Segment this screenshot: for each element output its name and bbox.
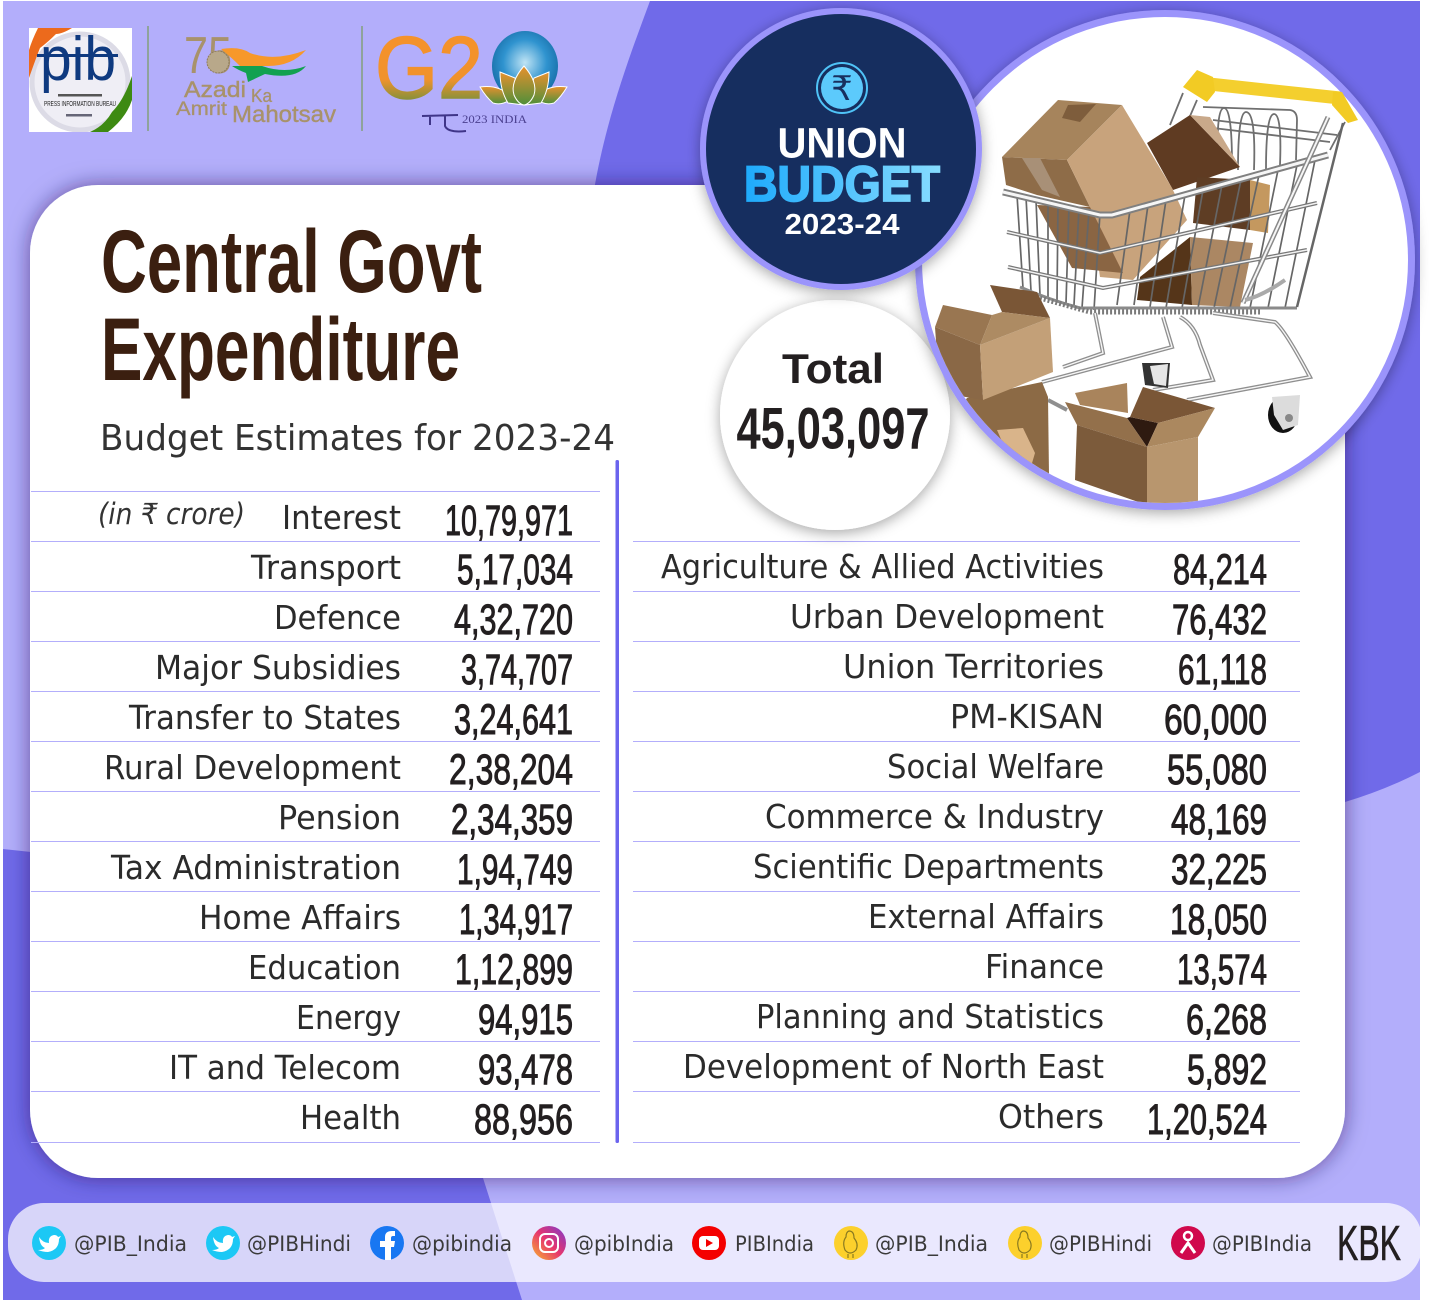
icon: rupee: ₹ — [831, 69, 853, 109]
row: Social Welfare: Social Welfare — [887, 747, 1104, 786]
row: Tax Administration: 1,94,749 — [457, 846, 573, 894]
icon: twitter — [32, 1226, 66, 1260]
row: IT and Telecom — [169, 1046, 573, 1094]
row: Social Welfare: 55,080 — [1167, 746, 1267, 794]
handle: @pibIndia: @pibIndia — [574, 1232, 674, 1256]
row: Union Territories: Union Territories — [843, 647, 1104, 686]
logo: PIB: PRESS INFORMATION BUREAU — [44, 101, 116, 108]
row: Energy — [296, 996, 573, 1044]
row: Urban Development: Urban Development — [790, 597, 1104, 636]
row: Interest — [282, 497, 573, 545]
row: Transfer to States: Transfer to States — [128, 698, 401, 737]
cart rear wires — [1170, 93, 1345, 170]
row: Health — [300, 1096, 573, 1144]
icon: koo — [834, 1226, 868, 1260]
footer: social media band — [8, 1203, 1422, 1282]
logo: Azadi Ka Amrit Mahotsav: Amrit — [176, 99, 228, 120]
row: Scientific Departments: Scientific Departments — [753, 847, 1104, 886]
cart frame and wheels — [1042, 313, 1310, 433]
row: Pension — [278, 796, 573, 844]
logo: Azadi Ka Amrit Mahotsav: Azadi — [184, 77, 246, 102]
lower boxes — [935, 285, 1215, 505]
row: Development of North East — [683, 1046, 1267, 1094]
callout: total — [720, 300, 950, 530]
logo: Azadi Ka Amrit Mahotsav: Mahotsav — [232, 101, 337, 127]
logo: G20: G2 — [375, 18, 483, 117]
row: External Affairs: External Affairs — [868, 897, 1104, 936]
row: Agriculture: 84,214 — [1173, 546, 1267, 594]
row: IT and Telecom: 93,478 — [478, 1046, 573, 1094]
row: Commerce and Industry — [765, 796, 1267, 844]
icon: youtube — [692, 1226, 726, 1260]
row: Rural Development: Rural Development — [104, 748, 401, 787]
row: Health: 88,956 — [474, 1096, 573, 1144]
row: Planning and Statistics: Planning and Statistics — [756, 997, 1104, 1036]
row: Major Subsidies — [155, 646, 573, 694]
row: Agriculture: Agriculture & Allied Activities — [661, 547, 1104, 586]
table: left column — [31, 492, 600, 1144]
cart handle — [1183, 70, 1358, 123]
handle: @PIBHindi: @PIBHindi — [247, 1232, 351, 1256]
handle: @PIBIndia: @PIBIndia — [1212, 1232, 1312, 1256]
row: Finance: Finance — [985, 947, 1104, 986]
row: PM-KISAN — [950, 696, 1267, 744]
row: Energy: 94,915 — [478, 996, 573, 1044]
row: Planning and Statistics: 6,268 — [1186, 996, 1267, 1044]
row: Transfer to States: 3,24,641 — [454, 696, 573, 744]
row: PM-KISAN: 60,000 — [1164, 696, 1267, 744]
title: Central Govt — [101, 211, 482, 311]
row: Development of North East: Development of North East — [683, 1047, 1104, 1086]
icon: koo hindi — [1008, 1226, 1042, 1260]
row: Urban Development — [790, 596, 1267, 644]
row: Others: Others — [998, 1097, 1104, 1136]
icon: facebook — [370, 1226, 404, 1260]
row: Development of North East: 5,892 — [1187, 1046, 1267, 1094]
row: Rural Development — [104, 746, 573, 794]
row: Finance: 13,574 — [1177, 946, 1267, 994]
logo: Azadi Ka Amrit Mahotsav: 75 — [184, 27, 232, 85]
row: Interest: Interest — [282, 498, 401, 537]
badge: Union Budget 2023-24: 2023-24 — [784, 209, 900, 241]
row: Major Subsidies: 3,74,707 — [461, 646, 573, 694]
row: Commerce and Industry: Commerce & Industry — [765, 797, 1104, 836]
row: Pension: Pension — [278, 798, 401, 837]
logo: PIB — [29, 25, 132, 132]
row: Pension: 2,34,359 — [451, 796, 573, 844]
panel: logos header — [29, 18, 567, 132]
row: Home Affairs — [199, 896, 573, 944]
row: Union Territories — [843, 646, 1267, 694]
row: Rural Development: 2,38,204 — [449, 746, 573, 794]
row: External Affairs: 18,050 — [1170, 896, 1267, 944]
row: Major Subsidies: Major Subsidies — [155, 648, 401, 687]
row: Home Affairs: Home Affairs — [199, 898, 401, 937]
rear boxes — [1137, 115, 1270, 307]
logo: G20 — [375, 18, 567, 131]
panel: main white card — [30, 185, 1345, 1178]
row: Interest: 10,79,971 — [445, 497, 573, 545]
illustration: shopping cart with boxes — [918, 14, 1412, 506]
row: Home Affairs: 1,34,917 — [459, 896, 573, 944]
badge: Union Budget 2023-24: BUDGET — [744, 156, 940, 212]
row: Union Territories: 61,118 — [1178, 646, 1267, 694]
row: Health: Health — [300, 1098, 401, 1137]
cart front wires — [1003, 117, 1343, 312]
logo: Azadi Ka Amrit Mahotsav: Ka — [251, 86, 273, 106]
row: Commerce and Industry: 48,169 — [1171, 796, 1267, 844]
row: Defence — [274, 596, 573, 644]
callout: total: Total — [782, 345, 884, 392]
row: Defence: 4,32,720 — [454, 596, 573, 644]
row: Defence: Defence — [274, 598, 401, 637]
big tilted box — [1002, 100, 1187, 280]
handle: PIBIndia: PIBIndia — [735, 1232, 814, 1256]
badge: Union Budget 2023-24 — [703, 11, 979, 287]
row: Education: Education — [248, 948, 401, 987]
callout: total: 45,03,097 — [736, 396, 930, 462]
row: Planning and Statistics — [756, 996, 1267, 1044]
handle: @PIB_India: @PIB_India — [74, 1232, 187, 1257]
row: Transfer to States — [128, 696, 573, 744]
row: Others: 1,20,524 — [1147, 1096, 1267, 1144]
handle: @PIBHindi koo: @PIBHindi — [1049, 1232, 1152, 1256]
row: Tax Administration — [110, 846, 573, 894]
icon: twitter hindi — [206, 1226, 240, 1260]
row: Education: 1,12,899 — [455, 946, 573, 994]
row: Energy: Energy — [296, 998, 401, 1037]
title — [101, 211, 482, 399]
badge: Union Budget 2023-24: UNION — [778, 120, 906, 168]
row: Scientific Departments — [753, 846, 1267, 894]
row: PM-KISAN: PM-KISAN — [950, 697, 1104, 736]
row: Finance — [985, 946, 1267, 994]
table: right column — [633, 542, 1300, 1144]
row: Scientific Departments: 32,225 — [1171, 846, 1267, 894]
row: Social Welfare — [887, 746, 1267, 794]
row: Others — [998, 1096, 1267, 1144]
row: Transport: 5,17,034 — [457, 546, 573, 594]
row: Transport — [250, 546, 573, 594]
column divider — [616, 460, 619, 1143]
row: Urban Development: 76,432 — [1172, 596, 1267, 644]
row: Tax Administration: Tax Administration — [110, 848, 401, 887]
row: IT and Telecom: IT and Telecom — [169, 1048, 401, 1087]
handle: @pibindia: @pibindia — [412, 1232, 512, 1256]
row: Education — [248, 946, 573, 994]
row: External Affairs — [868, 896, 1267, 944]
logo: G20: 2023 INDIA — [462, 112, 527, 126]
icon: rupee — [817, 63, 867, 113]
logo: Azadi Ka Amrit Mahotsav — [176, 27, 337, 127]
row: Transport: Transport — [250, 548, 401, 587]
handle: @PIB_India koo: @PIB_India — [875, 1232, 988, 1257]
row: Agriculture — [661, 546, 1267, 594]
icon: instagram — [532, 1226, 566, 1260]
icon: sharechat — [1171, 1226, 1205, 1260]
unit note: (in ₹ crore) — [98, 497, 245, 531]
logo: PIB: pib — [40, 25, 116, 94]
title: Expenditure — [101, 299, 460, 399]
subtitle: Budget Estimates for 2023-24 — [100, 418, 615, 459]
